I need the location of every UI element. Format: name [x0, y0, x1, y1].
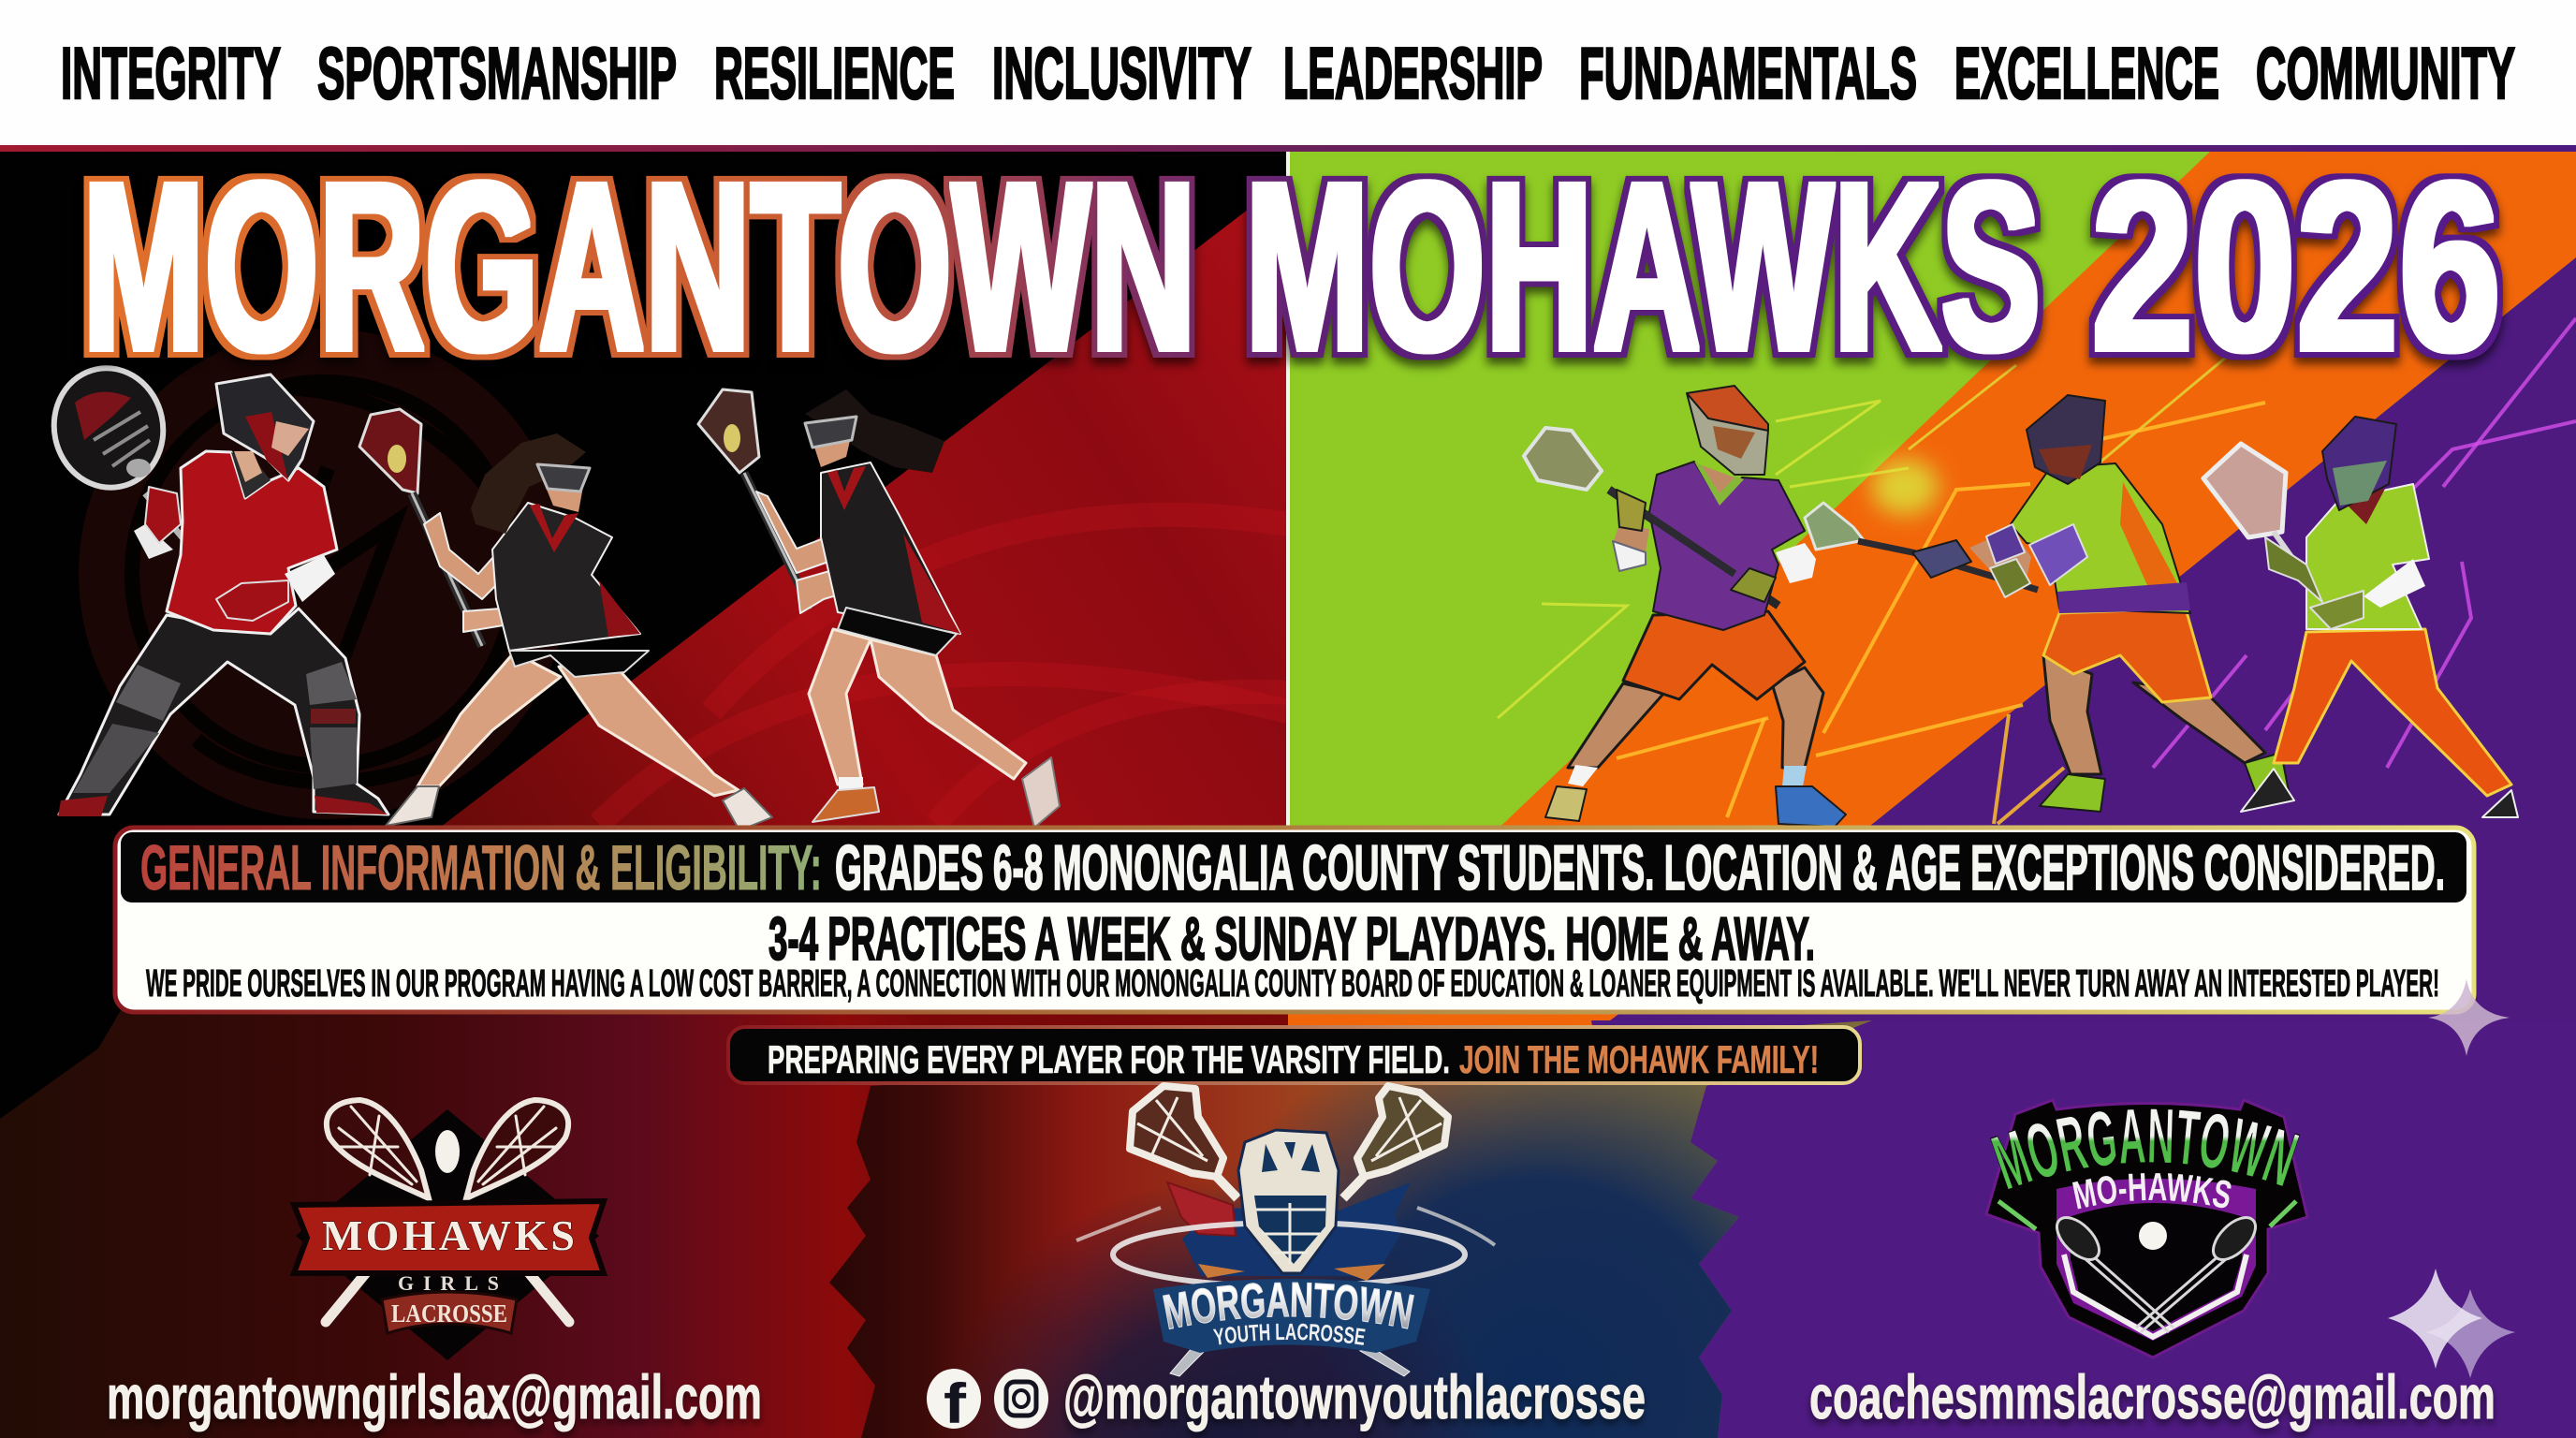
background: lower right purple zone	[1591, 1020, 2576, 1438]
value: integrity: INTEGRITY	[61, 32, 281, 114]
lacrosse word: LACROSSE	[391, 1299, 507, 1328]
illustration: boys goalie	[2203, 417, 2518, 817]
practice schedule: 3-4 PRACTICES A WEEK & SUNDAY PLAYDAYS. HOME & AWAY.	[768, 904, 1815, 973]
callout white text: PREPARING EVERY PLAYER FOR THE VARSITY FIELD.	[768, 1037, 1450, 1081]
title word: mohawks: MOHAWKS	[1245, 133, 2041, 401]
illustration: girls attacker two	[698, 389, 1060, 828]
swoosh tails	[1076, 1208, 1495, 1245]
sparkle small	[2428, 979, 2510, 1056]
panel: general information and eligibility	[115, 828, 2474, 1012]
logo: morgantown mo-hawks shield	[1984, 1098, 2309, 1359]
eligibility heading: GENERAL INFORMATION & ELIGIBILITY:	[140, 832, 822, 903]
illustration: girls goalie	[43, 358, 388, 816]
logo: morgantown youth lacrosse	[1076, 1082, 1496, 1377]
lacrosse ribbon	[382, 1292, 517, 1333]
crossed sticks	[326, 1100, 569, 1322]
contact: social handle: @morgantownyouthlacrosse	[1063, 1362, 1646, 1431]
background: white header band	[0, 0, 2576, 148]
background: right lime orange purple panel	[1286, 150, 2576, 1034]
girls word: GIRLS	[398, 1271, 499, 1295]
purple panel	[2056, 1179, 2256, 1341]
eligibility black bar	[121, 832, 2466, 902]
background: lower left dark red zone	[0, 833, 1288, 1438]
mo-hawks word: MO-HAWKS	[2072, 1173, 2232, 1210]
name banner	[1153, 1279, 1430, 1353]
illustration: boys attacker in purple	[1524, 386, 1864, 827]
icon: instagram	[994, 1369, 1048, 1429]
value: leadership: LEADERSHIP	[1283, 32, 1543, 114]
arc guide	[2006, 1163, 2293, 1191]
green side chevrons	[1998, 1201, 2296, 1229]
rule under header	[0, 145, 2576, 152]
title word: morgantown: MORGANTOWN	[82, 133, 1196, 401]
icon: facebook	[927, 1369, 981, 1435]
value: fundamentals: FUNDAMENTALS	[1579, 32, 1917, 114]
inner shield outline	[2064, 1255, 2247, 1337]
logo: mohawks girls lacrosse	[294, 1100, 604, 1360]
value: excellence: EXCELLENCE	[1954, 32, 2219, 114]
background: lower centre torn colour zone	[829, 1020, 1872, 1438]
value: resilience: RESILIENCE	[714, 32, 955, 114]
arc guide	[1167, 1316, 1412, 1329]
lower stick handles	[1170, 1348, 1410, 1376]
main title	[82, 133, 2501, 401]
ball	[435, 1130, 460, 1173]
callout orange text: JOIN THE MOHAWK FAMILY!	[1459, 1037, 1819, 1081]
morgantown word: MORGANTOWN	[1163, 1283, 1414, 1329]
morgantown green word: MORGANTOWN	[1990, 1108, 2301, 1189]
stick heads	[1130, 1086, 1448, 1198]
youth lacrosse word: YOUTH LACROSSE	[1213, 1324, 1366, 1345]
sparkle large pair	[2388, 1269, 2515, 1378]
contact: girls email: morgantowngirlslax@gmail.com	[107, 1362, 762, 1431]
red banner	[294, 1201, 604, 1273]
value: inclusivity: INCLUSIVITY	[992, 32, 1251, 114]
banner word: MOHAWKS	[322, 1211, 575, 1259]
ball	[2139, 1222, 2167, 1250]
inner black field	[2069, 1203, 2244, 1331]
header values row	[61, 32, 2515, 114]
background: left black and red diagonal panel	[0, 150, 1288, 1133]
value: sportsmanship: SPORTSMANSHIP	[317, 32, 677, 114]
icon: facebook: f	[944, 1372, 967, 1435]
ring swirl	[1113, 1223, 1465, 1286]
illustration: boys attacker in lime	[1858, 395, 2290, 812]
helmet	[1238, 1130, 1339, 1273]
flared wings	[1182, 1182, 1411, 1276]
illustration: girls attacker one	[359, 409, 772, 830]
callout: join the mohawk family	[728, 1027, 1860, 1083]
small crossed sticks	[2050, 1211, 2262, 1332]
